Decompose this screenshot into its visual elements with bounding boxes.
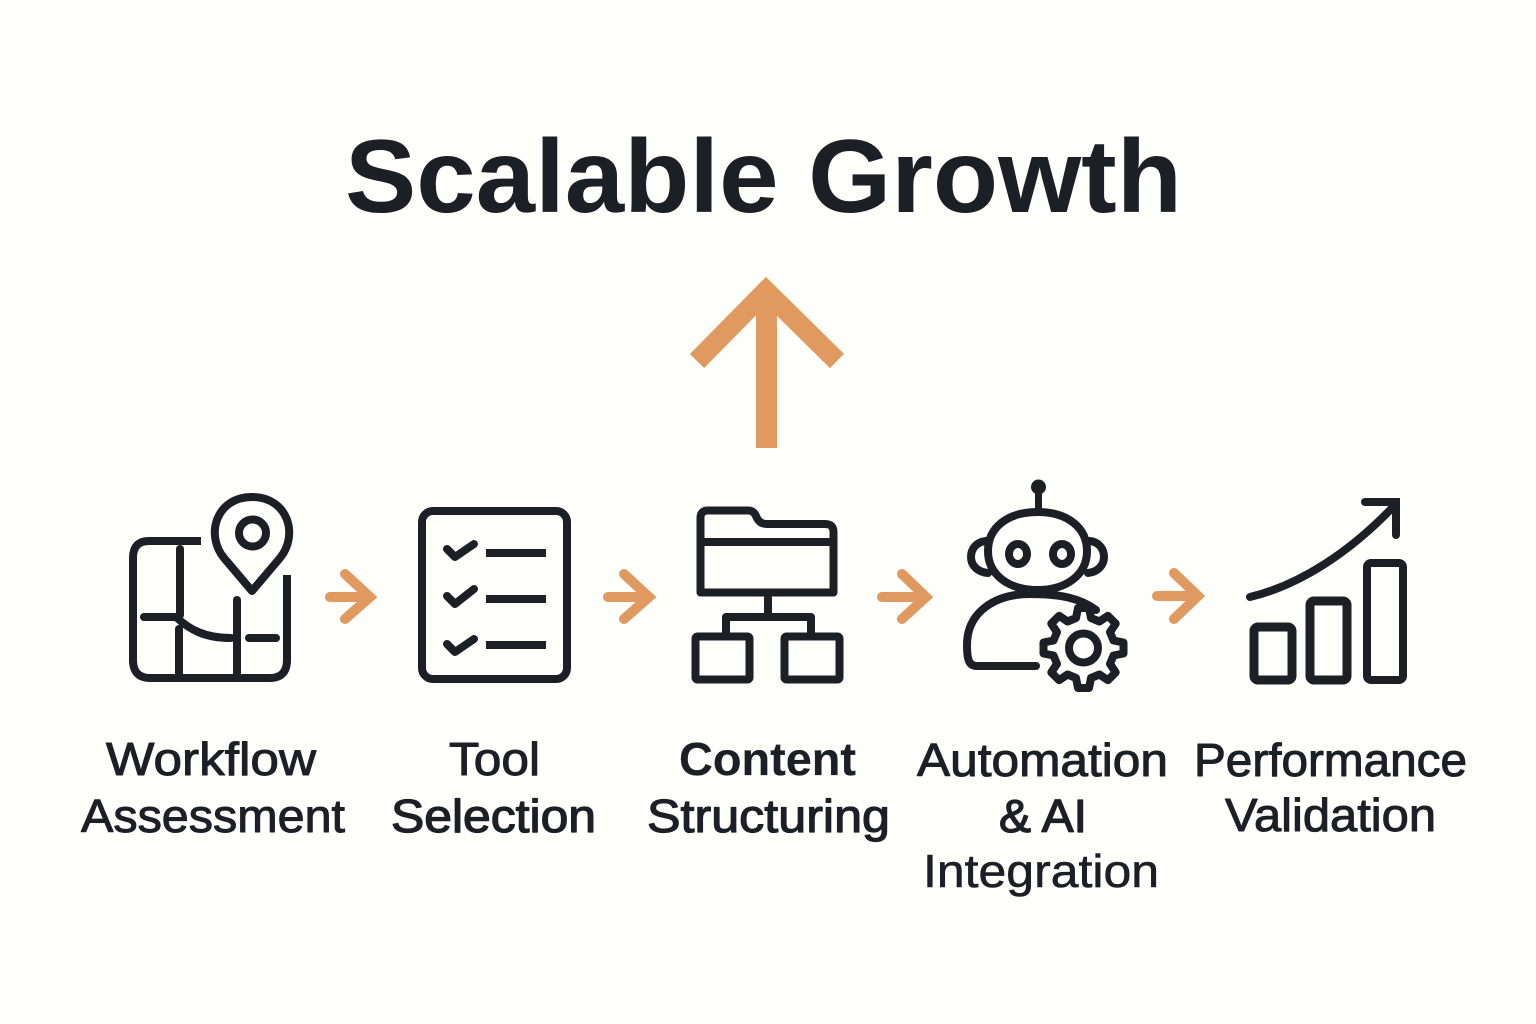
label: Automation & AI Integration: & AI [999, 790, 1087, 842]
label: Content Structuring: Structuring [647, 790, 890, 842]
icon: checklist [422, 511, 567, 679]
label: Automation & AI Integration: Integration [923, 845, 1159, 897]
arrow: large up arrow [697, 291, 837, 448]
label: Performance Validation: Validation [1225, 789, 1436, 841]
arrow: step 4 to 5 [1157, 573, 1198, 619]
icon: map with location pin [133, 497, 289, 678]
arrow: step 3 to 4 [882, 574, 926, 619]
title: Scalable Growth [345, 119, 1182, 235]
icon: robot with gear [967, 484, 1124, 688]
label: Content Structuring: Content [679, 733, 856, 785]
step 3: content structuring [647, 510, 890, 842]
label: Workflow Assessment: Assessment [81, 790, 345, 842]
step 4: automation and AI integration [917, 484, 1168, 897]
arrow: step 2 to 3 [608, 574, 649, 619]
label: Performance Validation [1194, 734, 1467, 841]
label: Automation & AI Integration: Automation [917, 734, 1168, 786]
label: Performance Validation: Performance [1194, 734, 1467, 786]
step 1: workflow assessment [81, 497, 345, 842]
label: Tool Selection: Tool [449, 733, 540, 785]
arrow: step 1 to 2 [330, 574, 370, 619]
step 5: performance validation [1194, 502, 1467, 841]
label: Automation & AI Integration [917, 734, 1168, 897]
label: Workflow Assessment [81, 733, 345, 842]
label: Tool Selection: Selection [391, 790, 596, 842]
label: Content Structuring [647, 733, 890, 842]
step 2: tool selection [391, 511, 596, 842]
icon: folder hierarchy [696, 510, 840, 680]
label: Workflow Assessment: Workflow [106, 733, 317, 785]
label: Tool Selection [391, 733, 596, 842]
icon: rising bar chart [1250, 502, 1403, 680]
